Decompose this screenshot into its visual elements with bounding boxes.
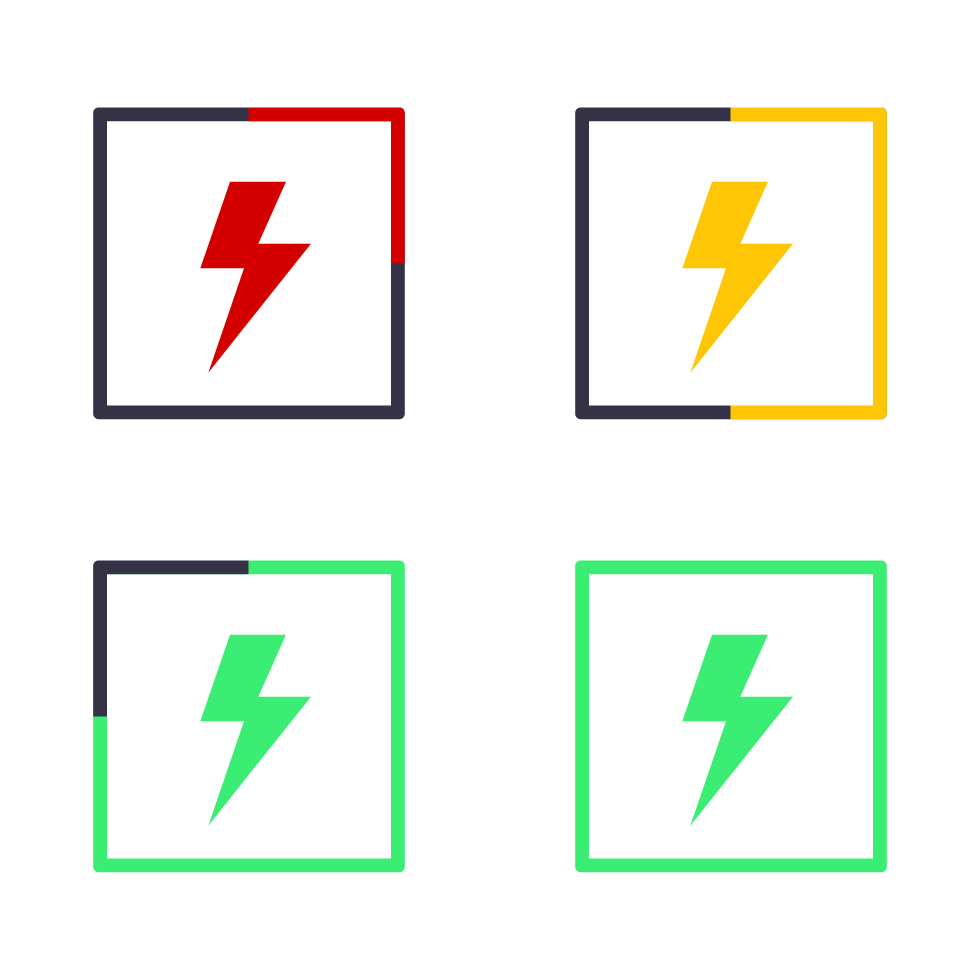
icon: red low-charge frame with bolt [93, 108, 405, 419]
frame base: dark [93, 108, 405, 419]
frame segment: dark [93, 560, 248, 716]
icon: green lightning bolt [200, 635, 311, 826]
frame: green [575, 560, 887, 872]
icon: green three-quarter-charge frame with bolt [93, 560, 405, 872]
frame segment: red [248, 108, 405, 264]
icon: red lightning bolt [200, 182, 311, 373]
icon: yellow half-charge frame with bolt [575, 108, 887, 419]
icon: yellow lightning bolt [682, 182, 793, 373]
icon: green lightning bolt [682, 635, 793, 826]
icon: green full-charge frame with bolt [575, 560, 887, 872]
frame base: green [93, 560, 405, 872]
frame base: dark [575, 108, 887, 419]
frame segment: yellow [730, 108, 887, 420]
infographic: four charge-level icons [93, 108, 887, 872]
